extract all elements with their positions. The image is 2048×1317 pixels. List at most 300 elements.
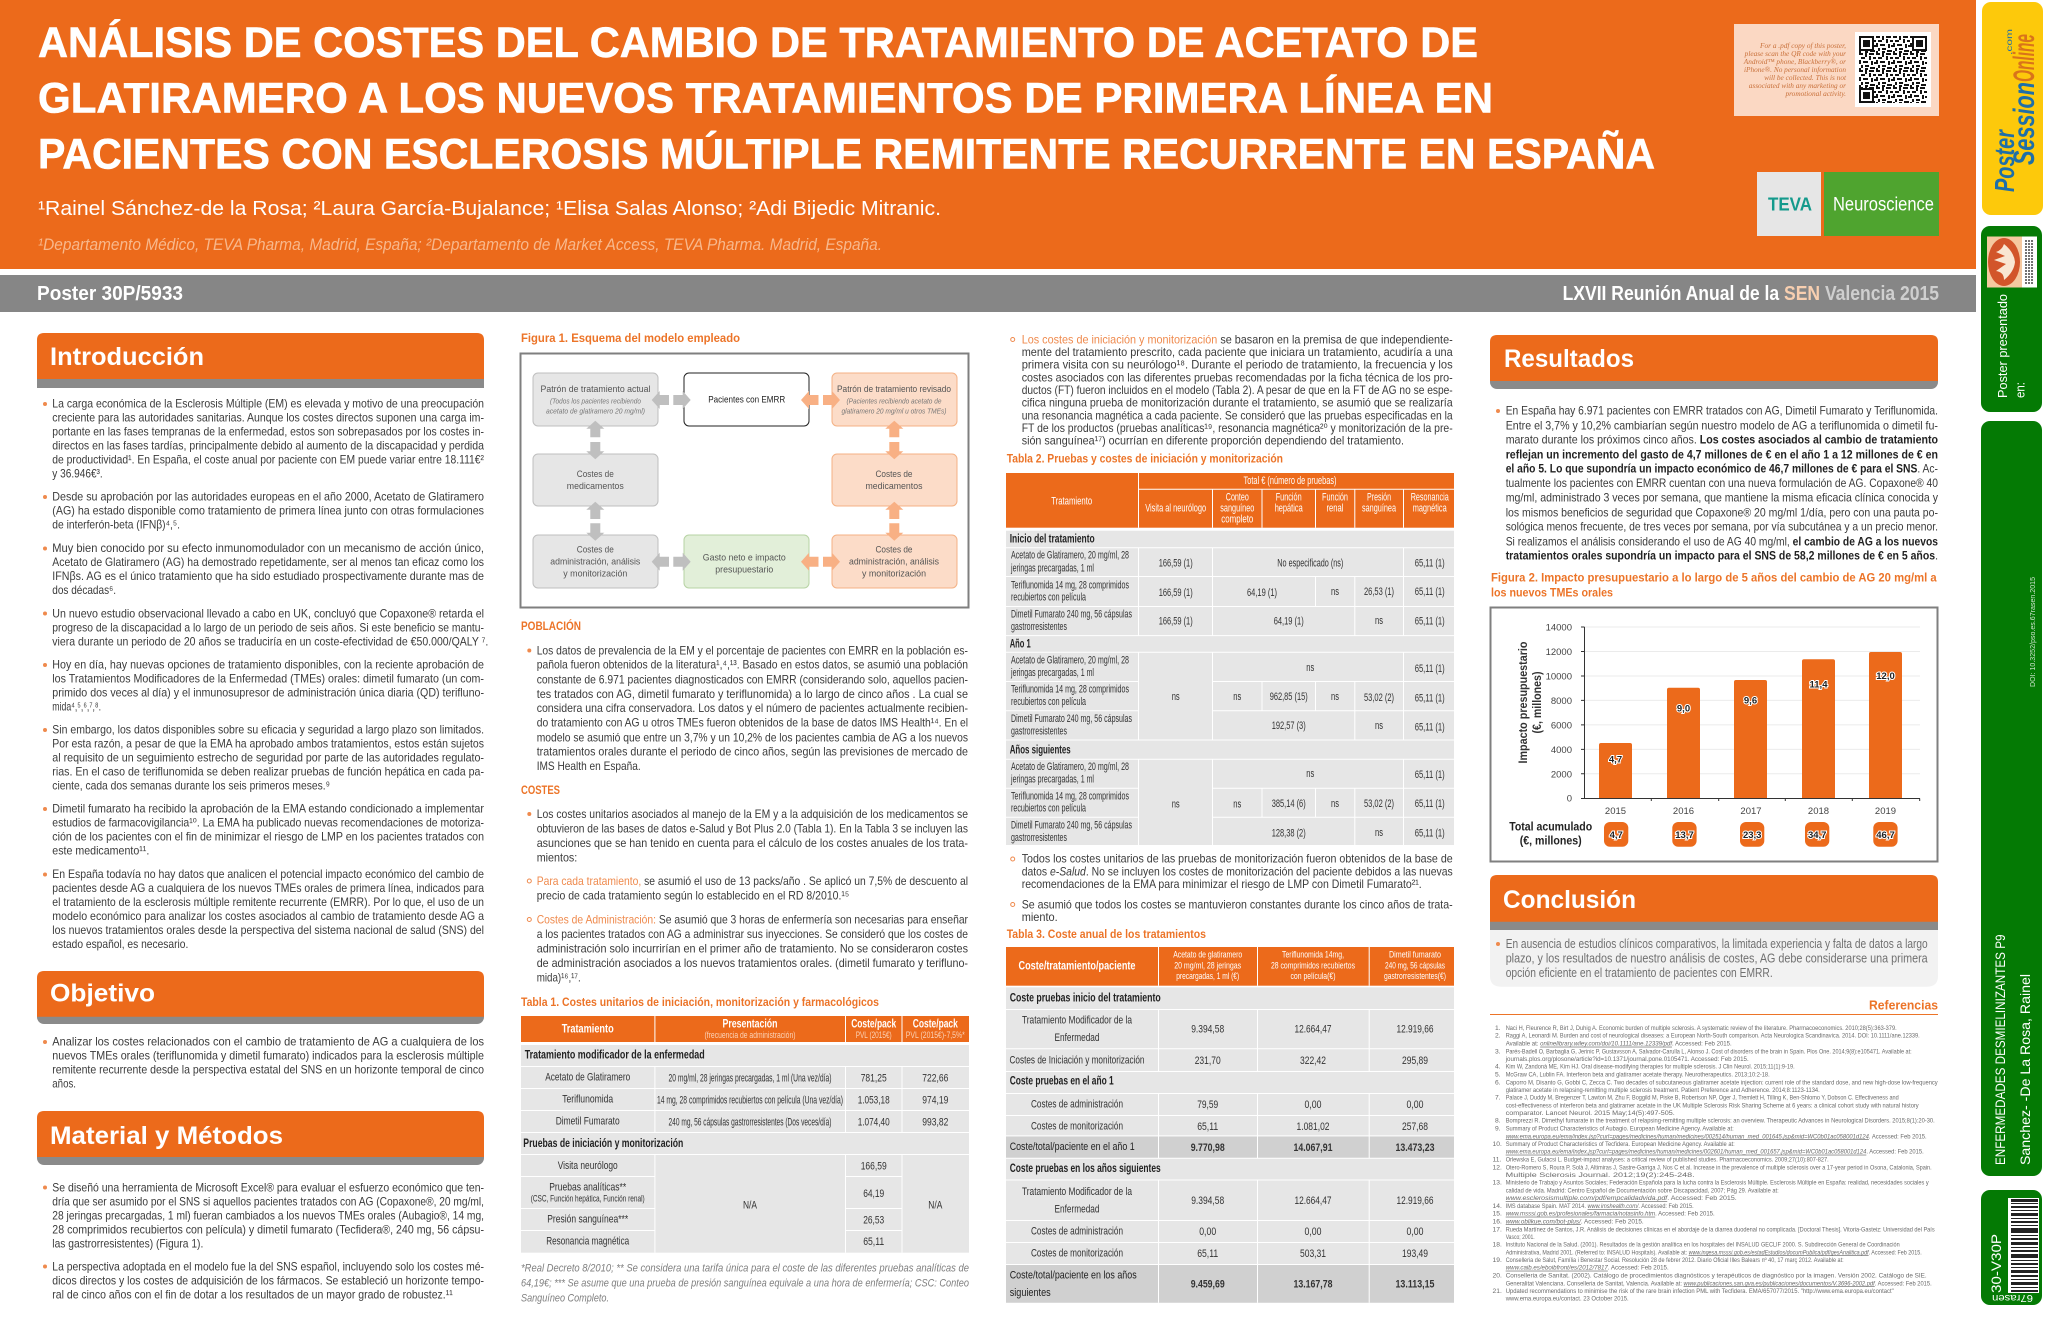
- section: inicio del tratamiento: Teriflunomida 14 mg, 28 comprimidos: [1011, 579, 1129, 591]
- text block: conclusión: En ausencia de estudios clínicos comparativos, la limitada experiencia y falta de datos a largo: [1506, 937, 1928, 951]
- table 3: Coste/tratamiento/paciente: [1018, 960, 1136, 972]
- column 3: [1006, 332, 1454, 1303]
- x axis labels: 2017: [1740, 806, 1762, 817]
- text block: introducción: progreso de la discapacidad a lo largo de un periodo de seis años. Si este beneficio se mantu-: [52, 620, 484, 634]
- logo: PosterSessionOnline: [1982, 2, 2043, 215]
- section: años siguientes: ns: [1306, 768, 1315, 780]
- QR panel: will be collected. This is not: [1764, 73, 1847, 82]
- text block: costes: Costes de Administración: Se asumió que 3 horas de enfermería son necesarias para enseñar: [537, 912, 968, 926]
- table 3 heading: Tabla 3. Coste anual de los tratamientos: [1007, 929, 1206, 941]
- logo: Teva Neuroscience: Neuroscience: [1833, 194, 1934, 216]
- text block: supuestos: [1011, 852, 1453, 924]
- section: inicio del tratamiento: Acetato de Glatiramero, 20 mg/ml, 28: [1011, 550, 1129, 562]
- references list: McGraw CA, Lublin FA. Interferon beta and glatiramer acetate therapy. Neurotherapeutics. 2013;10:2-18.: [1506, 1071, 1770, 1078]
- references list: 21.: [1492, 1288, 1502, 1295]
- text block: costes de iniciación: [1011, 332, 1453, 448]
- section: años siguientes: 65,11 (1): [1415, 769, 1445, 781]
- panel: session info: [1981, 421, 2042, 1176]
- QR panel: Android™ phone, Blackberry®, or: [1743, 57, 1846, 66]
- table 1: 781,25: [861, 1072, 887, 1084]
- table 3: 0,00: [1199, 1226, 1216, 1238]
- column 1: [37, 333, 488, 1301]
- column 2: [520, 333, 969, 1305]
- references list: www.ema.europa.eu/ema/index.jsp?curl=pages/medicines/human/medicines/002514/human_med_001645.jsp&mid=WC0b01ac058001d124. Accessed: Feb 2015.: [1506, 1133, 1927, 1140]
- text block: resultados: reflejan un incremento del gasto de 4,7 millones de € en el año 1 a 12 millones de € en: [1506, 447, 1938, 461]
- references list: Summary of Product Characteristics of Tecfidera. European Medicine Agency. Available at:: [1506, 1141, 1735, 1148]
- table 1: Tratamiento modificador de la enfermedad: [525, 1050, 705, 1062]
- section: inicio del tratamiento: ns: [1331, 586, 1339, 598]
- text block: introducción: estudios de farmacovigilancia¹⁰. La EMA ha publicado nuevas recomendaciones de motoriza-: [52, 816, 484, 830]
- table 3: Teriflunomida 14mg,: [1282, 950, 1344, 961]
- table 3: 0,00: [1304, 1099, 1322, 1111]
- table 3: Tratamiento Modificador de la: [1022, 1014, 1133, 1026]
- y axis labels: 10000: [1546, 672, 1572, 682]
- table 3: Coste/total/paciente en los años: [1010, 1269, 1137, 1281]
- references list: Naci H, Fleurence R, Birt J, Duhig A. Economic burden of multiple sclerosis. A systematic review of the literature. Pharmacoeconomics. 2010;28(5):363-379.: [1506, 1025, 1897, 1032]
- text block: resultados: Si realizamos el análisis considerando el uso de AG 40 mg/ml, el cambio de AG a los nuevos: [1506, 534, 1938, 548]
- box labels: Gasto neto e impacto: [703, 552, 786, 563]
- references list: Palace J, Duddy M, Bregenzer T, Lawton M, Zhu F, Boggild M, Piske B, Robertson NP, Oger J, Tremlett H, Tilling K, Ben-Shlomo Y, Dobson C. Effectiveness and: [1506, 1095, 1899, 1102]
- section: año 1: [1010, 638, 1445, 738]
- table 1: Resonancia magnética: [546, 1236, 630, 1248]
- box labels: acetato de glatiramero 20 mg/ml): [546, 407, 645, 416]
- table 1: 64,19: [863, 1188, 884, 1200]
- text block: resultados: los mismos beneficios de seguridad que Copaxone® 20 mg/ml 1/día, pero con una pauta po-: [1506, 505, 1938, 519]
- table 1: 20 mg/ml, 28 jeringas precargadas, 1 ml (Una vez/día): [668, 1072, 832, 1084]
- QR panel: For a .pdf copy of this poster,: [1759, 41, 1846, 50]
- box labels: Costes de: [577, 469, 614, 480]
- text block: población: modelo se asumió que entre un 3,7% y un 10,2% de los pacientes cambia de AG a los nuevos: [537, 730, 968, 744]
- table 1 footnote: *Real Decreto 8/2010; ** Se considera una tarifa única para el coste de las diferentes pruebas analíticas de: [521, 1263, 969, 1275]
- references list: 6.: [1495, 1079, 1501, 1086]
- y axis labels: 0: [1567, 794, 1572, 804]
- table 2: Visita al neurólogo: [1145, 502, 1206, 514]
- text block: costes: obtuvieron de las bases de datos e-Salud y Bot Plus 2.0 (Tabla 1). En la Tabla 3 se incluyen las: [537, 821, 968, 835]
- section: inicio del tratamiento: recubiertos con película: [1011, 592, 1086, 604]
- section: inicio del tratamiento: 26,53 (1): [1364, 586, 1394, 598]
- references list: 12.: [1492, 1164, 1502, 1171]
- references list: 5.: [1495, 1071, 1501, 1078]
- text block: resultados: tratamientos orales supondría un impacto para el SNS de 58,2 millones de € en 5 años.: [1506, 549, 1938, 563]
- arrows orange: [801, 391, 903, 571]
- references list: 19.: [1492, 1257, 1502, 1264]
- figure 2 heading: los nuevos TMEs orales: [1491, 587, 1613, 599]
- column 4: [1490, 335, 1938, 1303]
- text block: objetivo: años.: [52, 1077, 76, 1091]
- references list: calidad de vida. Madrid: Centro Español de Documentación sobre Discapacidad, 2007; Pág 29. Available at:: [1506, 1187, 1779, 1194]
- panel: session info: Sanchez- -De La Rosa, Rainel: [2017, 974, 2033, 1165]
- figure 2 heading: Figura 2. Impacto presupuestario a lo largo de 5 años del cambio de AG 20 mg/ml a: [1491, 573, 1937, 585]
- table 3: 0,00: [1406, 1226, 1424, 1238]
- table 2: magnética: [1413, 502, 1447, 514]
- table 1: Coste/pack: [851, 1018, 897, 1030]
- references list: www.caib.es/eboibfront/es/2012/7817. Accessed: Feb 2015.: [1506, 1265, 1669, 1272]
- references list: Available at: onlinelibrary.wiley.com/doi/10.1111/ane.12339/pdf. Accessed: Feb 2015.: [1506, 1041, 1732, 1048]
- text block: introducción: estado español, es necesario.: [52, 937, 188, 951]
- references list: Generalitat Valenciana. Conselleria de Sanitat, Valencia. Available at: www.publicaciones.san.gva.es/publicaciones/documentos/V.3696-2002.pdf. Accessed: Feb 2015.: [1506, 1280, 1932, 1287]
- QR panel: promotional activity.: [1784, 89, 1846, 98]
- section: año 1: Teriflunomida 14 mg, 28 comprimidos: [1011, 684, 1129, 696]
- table 1: 974,19: [922, 1094, 948, 1106]
- authors: ¹Rainel Sánchez-de la Rosa; ²Laura García-Bujalance; ¹Elisa Salas Alonso; ²Adi Bijedic Mitranic.: [38, 198, 941, 220]
- panel: poster code and barcode: [1981, 1190, 2042, 1305]
- text block: supuestos: recomendaciones de la EMA para minimizar el riesgo de LMP con Dimetil Fumarato²¹.: [1022, 877, 1422, 891]
- section: años siguientes: Años siguientes: [1010, 744, 1071, 756]
- table 1: Acetato de Glatiramero: [545, 1072, 630, 1084]
- table 3: 14.067,91: [1294, 1142, 1332, 1154]
- text block: introducción: Muy bien conocido por su efecto inmunomodulador con un mecanismo de acción único,: [52, 541, 484, 555]
- table 3: [1006, 947, 1454, 1303]
- section: año 1: 65,11 (1): [1415, 663, 1445, 675]
- text block: introducción: (AG) ha estado disponible como tratamiento de primera línea junto con otras formulaciones: [52, 504, 484, 518]
- section: inicio del tratamiento: 65,11 (1): [1415, 586, 1445, 598]
- section: inicio del tratamiento: gastrorresistentes: [1011, 621, 1067, 633]
- panel heading: Conclusión: Conclusión: [1503, 886, 1636, 914]
- cumulative total pills: 23,3: [1743, 830, 1761, 841]
- table 3: 20 mg/ml, 28 jeringas: [1174, 960, 1241, 971]
- references list: Orlewska E, Gulacsi L. Budget-impact analyses: a critical review of published studies. Pharmacoeconomics. 2009;27(10):807-827.: [1506, 1156, 1829, 1163]
- y axis labels: 14000: [1546, 622, 1572, 634]
- table 3: 9.394,58: [1191, 1024, 1224, 1036]
- text block: resultados: tualmente los pacientes con EMRR cuentan con una nueva formulación de AG. Copaxone® 40: [1506, 476, 1938, 490]
- text block: introducción: ciente, cada dos semanas durante los seis primeros meses.⁹: [52, 779, 330, 793]
- box labels: glatiramero 20 mg/ml u otros TMEs): [842, 407, 947, 416]
- section: años siguientes: 53,02 (2): [1364, 798, 1394, 810]
- figure 1: model diagram: [520, 354, 968, 608]
- text block: resultados: Entre el 3,7% y 10,2% cambiarían según nuestro modelo de AG a teriflunomida o dimetil fu-: [1506, 418, 1938, 432]
- bars: [1599, 652, 1902, 798]
- text block: población: IMS Health en España.: [537, 759, 641, 773]
- panel heading: Introducción: [37, 333, 484, 388]
- subheading: costes: COSTES: [521, 785, 560, 797]
- table 2: completo: [1221, 513, 1253, 525]
- references list: Summary of Product Characteristics of Aubagio. European Medicine Agency. Available at:: [1506, 1125, 1734, 1132]
- barcode: [2011, 1199, 2038, 1292]
- references list: www.esclerosismultiple.com/pdf/empcalidadvida.pdf . Accessed: Feb 2015.: [1506, 1195, 1737, 1202]
- text block: conclusión: plazo, y los resultados de nuestro análisis de costes, AG debe considerarse una primera: [1506, 952, 1928, 966]
- references list: Administrativa, Madrid 2001. (Referred to: INSALUD Hospitals). Available at: www.ingesa.msssi.gob.es/estadEstudios/documPublica/pdf/gesAnalitica.pdf. Accessed: Feb 2015.: [1506, 1249, 1922, 1256]
- references list: 4.: [1495, 1064, 1501, 1071]
- QR panel: iPhone®. No personal information: [1744, 65, 1846, 74]
- text block: objetivo: Analizar los costes relacionados con el cambio de tratamiento de AG a cualquiera de los: [52, 1035, 484, 1049]
- section: años siguientes: 65,11 (1): [1415, 798, 1445, 810]
- title: PACIENTES CON ESCLEROSIS MÚLTIPLE REMITENTE RECURRENTE EN ESPAÑA: [38, 129, 1655, 178]
- text block: introducción: modelo económico para analizar los costes asociados al cambio de tratamiento desde AG a: [52, 909, 484, 923]
- section: año 1: Dimetil Fumarato 240 mg, 56 cápsulas: [1011, 713, 1132, 725]
- panel heading: Material y Métodos: [37, 1111, 484, 1165]
- references list: cost-effectiveness of interferon beta and glatiramer acetate in the UK Multiple Sclerosis Risk Sharing Scheme at 6 years: a clinical cohort study with natural history: [1506, 1102, 1919, 1109]
- box labels: Costes de: [577, 545, 614, 556]
- references list: Multiple Sclerosis Journal. 2012;19(2):245-248.: [1506, 1172, 1695, 1179]
- text block: población: tes tratados con AG, dimetil fumarato y teriflunomida) a lo largo de cinco años . La cual se: [537, 687, 968, 701]
- table 3: 9.770,98: [1191, 1142, 1225, 1154]
- table 1: Presentación: [722, 1018, 778, 1030]
- references list: www.msssi.gob.es/profesionales/farmacia/notasinfo.htm. Accessed: Feb 2015.: [1506, 1211, 1715, 1218]
- box labels: (Todos los pacientes recibiendo: [550, 396, 641, 405]
- table 2: Función: [1322, 492, 1348, 504]
- table 2: renal: [1326, 502, 1344, 514]
- references list: Bomprezzi R. Dimethyl fumarate in the treatment of relapsing-remitting multiple sclerosis: an overview. Therapeutic Advances in Neurological Disorders. 2015;8(1):20-30.: [1506, 1118, 1935, 1125]
- text block: introducción: Por esta razón, a pesar de que la EMA ha aprobado ambos tratamientos, estos están sujetos: [52, 737, 484, 751]
- text block: costes de iniciación: sión sanguínea¹⁷) ocurrían en diferente proporción dependiendo del tratamiento.: [1022, 434, 1404, 448]
- table 2: hepática: [1275, 502, 1303, 514]
- table 1: 240 mg, 56 cápsulas gastrorresistentes (Dos veces/día): [668, 1116, 832, 1128]
- text block: material y métodos: Se diseñó una herramienta de Microsoft Excel® para evaluar el esfuerzo económico que ten-: [52, 1180, 484, 1194]
- text block: conclusión: opción eficiente en el tratamiento de pacientes con EMRR.: [1506, 966, 1773, 980]
- references list: Rueda Martínez de Santos, J.R. Análisis de decisiones clínicas en el abordaje de la diarrea duodenal no complicada. [Doctoral Thesis]. Vitoria-Gasteiz: Universidad del País: [1506, 1226, 1935, 1233]
- table 3: Costes de Iniciación y monitorización: [1010, 1054, 1144, 1066]
- cumulative total pills: 4,7: [1610, 830, 1623, 841]
- text block: introducción: [43, 397, 488, 951]
- title: ANÁLISIS DE COSTES DEL CAMBIO DE TRATAMIENTO DE ACETATO DE: [38, 19, 1478, 67]
- box labels: Patrón de tratamiento actual: [540, 384, 650, 395]
- box labels: presupuestario: [715, 564, 773, 575]
- table 2: Resonancia: [1411, 492, 1449, 504]
- text block: material y métodos: [43, 1180, 484, 1301]
- references list: 13.: [1492, 1180, 1502, 1187]
- references list: Vasco; 2001.: [1506, 1234, 1535, 1241]
- text block: costes: mida)¹⁶,¹⁷.: [537, 970, 581, 984]
- section: años siguientes: recubiertos con película: [1011, 803, 1086, 815]
- table 3: Costes de administración: [1031, 1098, 1123, 1110]
- section: años siguientes: ns: [1375, 827, 1383, 839]
- table 3: 13.473,23: [1396, 1142, 1434, 1154]
- section: inicio del tratamiento: 65,11 (1): [1415, 558, 1445, 570]
- text block: material y métodos: las gastrorresistentes) (Figura 1).: [52, 1236, 203, 1250]
- box labels: Pacientes con EMRR: [708, 395, 785, 406]
- text block: costes: de administración asociados a los nuevos tratamientos orales. (dimetil fumarato y teriflunο-: [537, 956, 968, 970]
- section: año 1: recubiertos con película: [1011, 696, 1086, 708]
- text block: población: Los datos de prevalencia de la EM y el porcentaje de pacientes con EMRR en la población es-: [537, 643, 968, 657]
- section: años siguientes: gastrorresistentes: [1011, 832, 1067, 844]
- table 3: 1.081,02: [1296, 1121, 1330, 1133]
- text block: introducción: de interferón-beta (IFNβ)⁴,⁵.: [52, 518, 180, 532]
- text block: costes: asunciones que se han tenido en cuenta para el cálculo de los costes anuales de los trata-: [537, 836, 968, 850]
- table 1: [521, 1016, 969, 1253]
- text block: introducción: viera durante un periodo de 20 años se traduciría en un coste-efectividad de €50.000/QALY ⁷.: [52, 634, 488, 648]
- table 1: (CSC, Función hepática, Función renal): [531, 1193, 645, 1203]
- text block: costes: Para cada tratamiento, se asumió el uso de 13 packs/año . Se aplicó un 7,5% de descuento al: [537, 874, 968, 888]
- text block: introducción: dos décadas⁶.: [52, 583, 116, 597]
- table 3: Costes de administración: [1031, 1226, 1123, 1238]
- text block: introducción: En España todavía no hay datos que analicen el potencial impacto económico del cambio de: [52, 867, 484, 881]
- text block: costes de iniciación: FT de los productos (pruebas analíticas¹⁹, resonancia magnética²⁰ y monitorización de la pre-: [1022, 421, 1453, 435]
- box labels: [540, 384, 951, 580]
- table 3: 9.459,69: [1191, 1279, 1225, 1291]
- panel: session info: ENFERMEDADES DESMIELINIZANTES P9: [1992, 934, 2008, 1165]
- section: años siguientes: Dimetil Fumarato 240 mg, 56 cápsulas: [1011, 819, 1132, 831]
- table 2: Conteo: [1226, 492, 1249, 504]
- QR panel: please scan the QR code with your: [1744, 49, 1846, 58]
- references heading: Referencias: [1869, 997, 1938, 1012]
- text block: introducción: creciente para las autoridades sanitarias. Aunque los costes directos suponen una carga im-: [52, 411, 484, 425]
- box labels: medicamentos: [567, 481, 624, 492]
- table 1: Presión sanguínea***: [547, 1214, 629, 1226]
- text block: resultados: mg/ml, administrado 3 veces por semana, que mantiene la misma eficacia clínica conocida y: [1506, 491, 1938, 505]
- cumulative total label: [1509, 822, 1592, 848]
- text block: costes de iniciación: una resonancia magnética a cada paciente. Se consideró que las pruebas especificadas en la: [1022, 408, 1453, 422]
- references list: 16.: [1492, 1218, 1502, 1225]
- bar value labels: [1609, 671, 1895, 766]
- bar value labels: 4,7: [1609, 755, 1622, 766]
- table 2: Total € (número de pruebas): [1244, 475, 1336, 487]
- panel heading: Conclusión: [1490, 875, 1938, 987]
- table 3: Coste pruebas inicio del tratamiento: [1010, 993, 1161, 1005]
- panel: poster code and barcode: 67rasen: [1992, 1292, 2033, 1303]
- text block: población: tratamientos orales durante el periodo de cinco años, según las previsiones de mercado de: [537, 745, 968, 759]
- text block: resultados: [1496, 404, 1938, 563]
- text block: costes: precio de cada tratamiento según lo establecido en el RD 8/2010.¹⁵: [537, 889, 849, 903]
- text block: introducción: los Tratamientos Modificadores de la Enfermedad (TMEs) orales: dimetil fumarato (un com-: [52, 672, 484, 686]
- section: año 1: 192,57 (3): [1272, 720, 1306, 732]
- references list: Conselleria de Sanitat. (2002). Catálogo de procedimientos diagnósticos y terapéuticos de diagnóstico por la imagen. Versión 2002. Catálogo de SIE.: [1506, 1273, 1927, 1280]
- table 1: 14 mg, 28 comprimidos recubiertos con película (Una vez/día): [657, 1094, 843, 1106]
- section: inicio del tratamiento: 64,19 (1): [1247, 587, 1277, 599]
- text block: resultados: el año 5. Lo que supondría un impacto económico de 46,7 millones de € para el SNS. Ac-: [1506, 462, 1938, 476]
- table 3: precargadas, 1 ml (€): [1176, 971, 1239, 982]
- table 3: 65,11: [1197, 1121, 1218, 1133]
- section: año 1: jeringas precargadas, 1 ml: [1010, 667, 1094, 679]
- box labels: y monitorización: [862, 569, 926, 580]
- table 3: Coste pruebas en los años siguientes: [1010, 1163, 1161, 1175]
- table 1: Pruebas analíticas**: [549, 1182, 627, 1194]
- box labels: (Pacientes recibiendo acetato de: [846, 396, 942, 405]
- boxes: [533, 373, 957, 588]
- text block: introducción: Sin embargo, los datos disponibles sobre su eficacia y seguridad a largo plazo son limitados.: [52, 723, 484, 737]
- table 3: 65,11: [1197, 1248, 1218, 1260]
- y axis labels: 8000: [1551, 696, 1572, 707]
- text block: costes de iniciación: primera visita con su neurólogo¹⁸. Durante el periodo de tratamiento, la frecuencia y los: [1022, 358, 1453, 372]
- QR panel: associated with any marketing or: [1749, 81, 1846, 90]
- text block: población: do tratamiento con AG u otros TMEs fueron obtenidos de la base de datos IMS Health¹⁴. En el: [537, 716, 968, 730]
- box labels: Costes de: [876, 469, 912, 480]
- figure 2 heading: [1491, 573, 1937, 599]
- logo: Teva Neuroscience: [1757, 172, 1939, 236]
- congress bar: [0, 275, 1976, 312]
- section: año 1: gastrorresistentes: [1011, 726, 1067, 738]
- y axis title: Impacto presupuestario: [1518, 642, 1530, 764]
- text block: introducción: IFNβs. AG es el único tratamiento que ha sido estudiado prospectivamente durante mas de: [52, 569, 484, 583]
- table 1: 1.074,40: [858, 1116, 890, 1128]
- section: año 1: ns: [1172, 691, 1180, 703]
- references list: 10.: [1492, 1141, 1502, 1148]
- panel heading: Objetivo: [37, 971, 484, 1024]
- table 3: Coste/total/paciente en el año 1: [1010, 1141, 1135, 1153]
- section: año 1: ns: [1375, 720, 1383, 732]
- sidebar: [1981, 2, 2043, 1305]
- text block: supuestos: miento.: [1022, 910, 1058, 924]
- references list: 20.: [1492, 1273, 1502, 1280]
- section: inicio del tratamiento: 166,59 (1): [1159, 616, 1193, 628]
- table 1: Dimetil Fumarato: [556, 1116, 620, 1128]
- text block: introducción: rias. En el caso de teriflunomida se deben realizar pruebas de función hepática en cada pa-: [52, 765, 484, 779]
- text block: costes de iniciación: costes asociados con las diferentes pruebas recomendadas por la ficha técnica de los pro-: [1022, 370, 1453, 384]
- text block: material y métodos: La perspectiva adoptada en el modelo fue la del SNS español, incluyendo solo los costes mé-: [52, 1259, 484, 1273]
- section: inicio del tratamiento: 166,59 (1): [1159, 587, 1193, 599]
- table 1 footnote: [521, 1263, 969, 1305]
- text block: conclusión: [1496, 937, 1928, 980]
- section: años siguientes: Acetato de Glatiramero, 20 mg/ml, 28: [1011, 761, 1129, 773]
- references list: 1.: [1495, 1025, 1501, 1032]
- references list: 11.: [1492, 1156, 1501, 1163]
- table 1: N/A: [743, 1200, 757, 1212]
- table 3: Dimetil fumarato: [1389, 950, 1441, 961]
- table 3: 12.664,47: [1294, 1195, 1332, 1207]
- table 1: Coste/pack: [913, 1018, 958, 1030]
- box labels: Patrón de tratamiento revisado: [837, 384, 951, 395]
- section: inicio del tratamiento: Dimetil Fumarato 240 mg, 56 cápsulas: [1011, 609, 1132, 621]
- x axis labels: 2016: [1673, 806, 1694, 817]
- logo: PosterSessionOnline: .com: [2005, 29, 2014, 55]
- text block: costes: [527, 807, 968, 984]
- text block: costes de iniciación: ductos (FT) fueron incluidos en el modelo (Tabla 2). A pesar de que en la FT de AG no se espe-: [1022, 383, 1453, 397]
- references list: 17.: [1492, 1226, 1502, 1233]
- panel: poster presentado en: Poster presentado: [1995, 294, 2010, 398]
- text block: introducción: mida⁴,⁵,⁶,⁷,⁸.: [52, 700, 101, 714]
- text block: introducción: los nuevos tratamientos orales desde la perspectiva del sistema nacional de salud (SNS) del: [52, 923, 484, 937]
- text block: introducción: el tratamiento de la esclerosis múltiple remitente recurrente (EMRR). Por lo que, el uso de un: [52, 895, 484, 909]
- box labels: administración, análisis: [849, 557, 939, 568]
- table 2 heading: Tabla 2. Pruebas y costes de iniciación y monitorización: [1007, 454, 1283, 466]
- references list: Updated recommendations to minimise the risk of the rare brain infection PML with Tecfidera. EMA/657077/2015. "http://www.ema.europa.eu/contact": [1506, 1288, 1894, 1295]
- references list: www.ema.europa.eu/ema/index.jsp?curl=pages/medicines/human/medicines/002601/human_med_001657.jsp&mid=WC0b01ac058001d124. Accessed: Feb 2015.: [1506, 1149, 1924, 1156]
- table 1: PVL (2015€)-7,5%*: [906, 1030, 965, 1040]
- logo: PosterSessionOnline: Session: [2008, 82, 2041, 165]
- table 3: 231,70: [1195, 1055, 1221, 1067]
- table 3: 503,31: [1300, 1248, 1326, 1260]
- text block: objetivo: remitente recurrente desde la perspectiva estatal del SNS en un horizonte temporal de cinco: [52, 1063, 484, 1077]
- references list: journals.plos.org/plosone/article?id=10.1371/journal.pone.0105471. Accessed: Feb 2015.: [1505, 1056, 1749, 1063]
- table 1: 993,82: [922, 1116, 948, 1128]
- text block: resultados: marato durante los próximos cinco años. Los costes asociados al cambio de tratamiento: [1506, 433, 1938, 447]
- table 3: 28 comprimidos recubiertos: [1271, 960, 1355, 971]
- text block: introducción: al requisito de un seguimiento estrecho de seguridad por parte de las autoridades regulato-: [52, 751, 484, 765]
- table 3: 12.664,47: [1294, 1024, 1332, 1036]
- text block: costes: administración solo incurrirían en el primer año de tratamiento. No se consideraron costes: [537, 942, 968, 956]
- table 3: con película(€): [1290, 971, 1336, 982]
- cumulative total pills: 13,7: [1675, 830, 1694, 841]
- table 1 heading: Tabla 1. Costes unitarios de iniciación, monitorización y farmacológicos: [521, 997, 879, 1009]
- section: años siguientes: Teriflunomida 14 mg, 28 comprimidos: [1011, 790, 1129, 802]
- table 1: Visita neurólogo: [558, 1160, 618, 1172]
- panel heading: Resultados: [1490, 335, 1938, 389]
- section: año 1: 65,11 (1): [1415, 692, 1445, 704]
- table 3: 12.919,66: [1396, 1195, 1434, 1207]
- text block: introducción: Dimetil fumarato ha recibido la aprobación de la EMA estando condicionado a implementar: [52, 802, 484, 816]
- table 3: 295,89: [1402, 1055, 1428, 1067]
- section: inicio del tratamiento: [1010, 534, 1445, 633]
- text block: introducción: Hoy en día, hay nuevas opciones de tratamiento disponibles, con la reciente aprobación de: [52, 658, 484, 672]
- text block: introducción: de productividad¹. En España, el coste anual por paciente con EM puede variar entre 18.111€²: [52, 453, 484, 467]
- section: años siguientes: 385,14 (6): [1272, 798, 1306, 810]
- section: inicio del tratamiento: 65,11 (1): [1415, 616, 1445, 628]
- affiliations: ¹Departamento Médico, TEVA Pharma, Madrid, España; ²Departamento de Market Access, TEVA Pharma. Madrid, España.: [38, 236, 882, 254]
- y axis labels: 12000: [1546, 647, 1572, 658]
- logo: Teva Neuroscience: TEVA: [1768, 194, 1812, 214]
- text block: costes: mientos:: [537, 850, 577, 864]
- references list: Kim W, Zandonà ME, Kim HJ. Oral disease-modifying therapies for multiple sclerosis. J Clin Neurol. 2015;11(1):9-19.: [1506, 1064, 1795, 1071]
- section: inicio del tratamiento: Inicio del tratamiento: [1010, 534, 1095, 546]
- table 3: Tratamiento Modificador de la: [1022, 1186, 1133, 1198]
- references list: Ministerio de Trabajo y Asuntos Sociales; Federación Española para la lucha contra la Esclerosis Múltiple. Esclerosis Múltiple en España: realidad, necesidades sociales y: [1506, 1180, 1929, 1187]
- table 3: 12.919,66: [1396, 1024, 1434, 1036]
- y axis labels: 4000: [1551, 745, 1572, 756]
- text block: material y métodos: dría que ser asumido por el SNS si aquellos pacientes tratados con AG (Copaxone®, 20 mg/ml,: [52, 1194, 484, 1208]
- references list: 18.: [1492, 1242, 1502, 1249]
- table 1: PVL (2015€): [856, 1030, 892, 1040]
- section: año 1: Año 1: [1010, 638, 1031, 650]
- references list: Parés-Badell O, Barbaglia G, Jerinic P, Gustavsson A, Salvador-Carulla L, Alonso J. Cost of disorders of the brain in Spain. Plos One. 2014;9(8):e105471. Available at:: [1506, 1048, 1912, 1055]
